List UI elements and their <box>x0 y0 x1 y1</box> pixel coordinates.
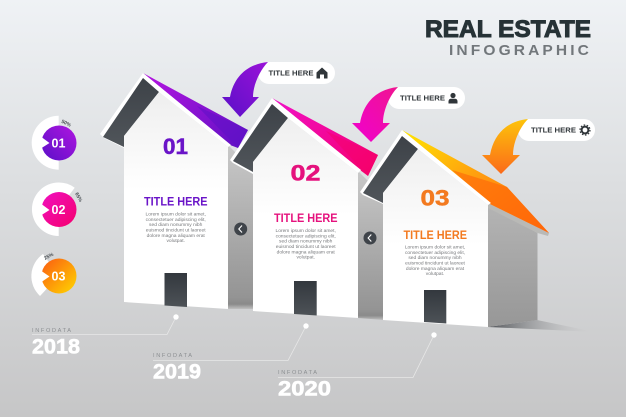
title <box>425 16 592 59</box>
title: REAL ESTATE <box>425 16 591 43</box>
chevron button 1 <box>234 222 247 236</box>
title: INFOGRAPHIC <box>449 42 592 59</box>
house 2: consectetuer adipiscing elit, <box>276 233 336 239</box>
house 3 <box>360 130 549 327</box>
house 1 <box>100 73 253 309</box>
callout 1 with arrow and home icon: TITLE HERE <box>268 68 314 78</box>
house 3: dolore magna aliquam erat <box>406 266 465 272</box>
house 2: Lorem ipsum dolor sit amet, <box>276 228 336 234</box>
house 2: dolore magna aliquam erat <box>277 249 335 255</box>
house 2: sed diam nonummy nibh <box>279 239 333 245</box>
house 1: Lorem ipsum dolor sit amet, <box>146 212 206 218</box>
progress badge 01: 01 <box>52 136 65 150</box>
timeline 2018: 2018 <box>32 336 80 358</box>
floor shadow <box>488 320 595 332</box>
house 2: euismod tincidunt ut laoreet <box>276 244 336 250</box>
callout 2 with arrow and person icon <box>352 87 465 142</box>
chevron button 2 <box>364 232 376 244</box>
progress badge 01 <box>32 116 76 170</box>
progress badge 02: 65% <box>73 192 83 204</box>
timeline 2018: INFODATA <box>32 328 71 334</box>
house 1: sed diam nonummy nibh <box>149 222 203 228</box>
callout 3 with arrow and gear icon <box>482 119 595 174</box>
house 3: Lorem ipsum dolor sit amet, <box>405 244 465 250</box>
house 2: TITLE HERE <box>274 211 338 225</box>
timeline 2019: INFODATA <box>153 353 192 359</box>
progress badge 03: 25% <box>43 252 55 262</box>
progress badge 02 <box>32 182 83 236</box>
callout 1 with arrow and home icon <box>222 62 335 117</box>
progress badge 02: 02 <box>52 203 65 217</box>
timeline 2018 <box>32 314 179 358</box>
house 1: dolore magna aliquam erat <box>147 233 205 239</box>
timeline 2019 <box>153 323 309 384</box>
house 3: sed diam nonummy nibh <box>408 255 462 261</box>
house 2 <box>230 98 383 320</box>
house 3: TITLE HERE <box>404 228 467 242</box>
house 1: 01 <box>163 134 188 159</box>
house 1: euismod tincidunt ut laoreet <box>146 228 206 234</box>
timeline 2020 <box>278 332 437 400</box>
house 3: consectetuer adipiscing elit, <box>405 250 465 256</box>
progress badge 03 <box>31 252 76 296</box>
house 2: volutpat. <box>296 255 315 261</box>
progress badge 03: 03 <box>52 270 65 284</box>
timeline 2019: 2019 <box>153 360 201 384</box>
callout 2 with arrow and person icon: TITLE HERE <box>400 94 445 102</box>
house 3: volutpat. <box>426 271 444 277</box>
house 1: TITLE HERE <box>144 194 208 208</box>
timeline 2020: INFODATA <box>278 370 317 376</box>
house 3: 03 <box>420 186 450 211</box>
house 2: 02 <box>290 161 320 186</box>
callout 3 with arrow and gear icon: TITLE HERE <box>531 126 576 134</box>
house 3: euismod tincidunt ut laoreet <box>405 260 466 266</box>
house 1: volutpat. <box>166 238 185 244</box>
timeline 2020: 2020 <box>278 378 331 400</box>
house 1: consectetuer adipiscing elit, <box>146 217 206 223</box>
progress badge 01: 50% <box>60 119 72 129</box>
